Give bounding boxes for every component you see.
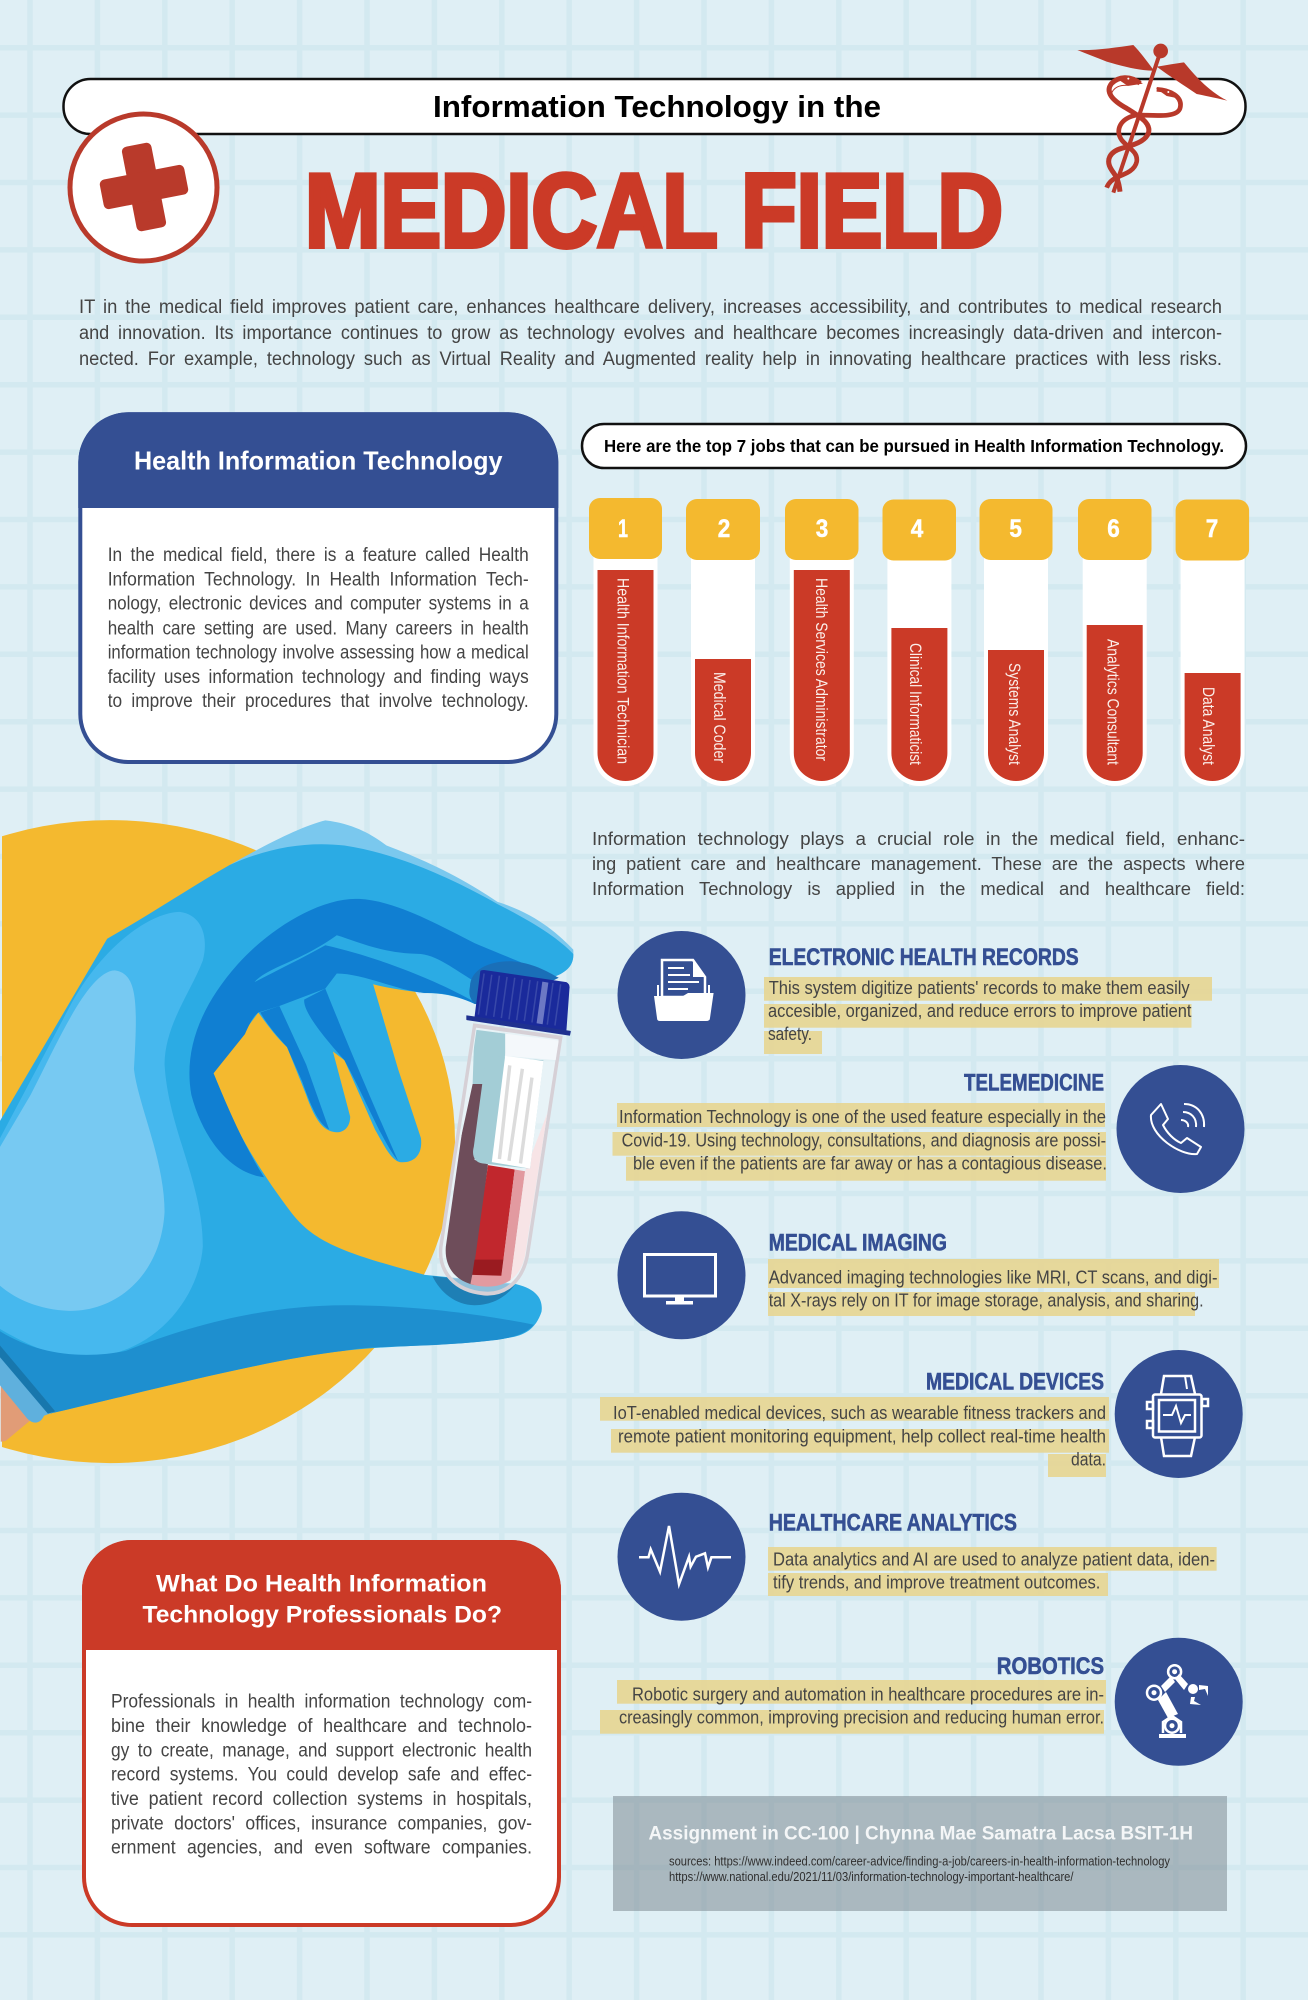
finger crook — [189, 899, 551, 1177]
panel body text: nology, electronic devices and computer systems in a — [108, 594, 529, 615]
panel body text — [111, 1692, 532, 1858]
tube 6: analytics consultant — [1078, 499, 1152, 786]
tube contact shadows — [432, 1276, 515, 1305]
description with highlight: Advanced imaging technologies like MRI, CT scans, and digi- — [769, 1268, 1218, 1288]
icon: robotic arm — [1115, 1638, 1243, 1766]
intro to applications paragraph: Information technology plays a crucial role in the medical field, enhanc- — [592, 828, 1245, 849]
footer: assignment credits and sources: sources: https://www.indeed.com/career-advice/finding-a-job/careers-in-health-information-technology — [669, 1855, 1171, 1869]
glove highlight — [230, 820, 573, 971]
tube 7: data analyst: 7 — [1206, 515, 1218, 543]
illustration: gloved hand holding blood tube — [0, 820, 573, 1463]
tube 5: systems analyst: Systems Analyst — [1005, 663, 1024, 765]
panel body text: health care setting are used. Many careers in health — [108, 618, 529, 639]
tube 4: clinical informaticist: Clinical Informaticist — [906, 643, 925, 765]
footer: assignment credits and sources: Assignment in CC-100 | Chynna Mae Samatra Lacsa BSIT-1H — [648, 1822, 1193, 1844]
icon: caduceus — [1077, 44, 1227, 193]
feature: medical imaging — [618, 1211, 1219, 1339]
tube 7: data analyst — [1176, 500, 1249, 786]
description with highlight — [612, 1103, 1107, 1181]
description with highlight: remote patient monitoring equipment, help collect real-time health — [618, 1426, 1106, 1446]
intro to applications paragraph: ing patient care and healthcare management. These are the aspects where — [592, 853, 1245, 874]
panel body text: Information Technology. In Health Information Tech- — [108, 569, 529, 590]
panel body text: private doctors' offices, insurance companies, gov- — [111, 1813, 532, 1834]
description with highlight: This system digitize patients' records to make them easily — [769, 978, 1190, 998]
title: MEDICAL IMAGING — [769, 1230, 947, 1257]
tube 4: clinical informaticist: 4 — [911, 515, 923, 543]
tube 5: systems analyst — [980, 499, 1052, 786]
description with highlight: Robotic surgery and automation in healthcare procedures are in- — [632, 1684, 1104, 1704]
cuff and wrist — [1, 1385, 31, 1442]
panel body text: facility uses information technology and finding ways — [108, 667, 529, 688]
panel body text: Professionals in health information technology com- — [111, 1692, 532, 1713]
intro paragraph — [79, 297, 1222, 370]
tube 3: health services administrator: Health Services Administrator — [812, 578, 831, 761]
chart: top 7 jobs test tubes — [589, 498, 1249, 786]
feature: robotics — [600, 1638, 1243, 1766]
tube cap — [467, 970, 570, 1035]
intro paragraph: nected. For example, technology such as Virtual Reality and Augmented reality help in innovating healthcare practices with less risks. — [79, 349, 1222, 370]
tube 6: analytics consultant: Analytics Consultant — [1104, 639, 1122, 765]
icon: smartwatch — [1115, 1350, 1243, 1478]
title: ROBOTICS — [997, 1653, 1104, 1680]
tube 3: health services administrator: 3 — [816, 515, 828, 543]
panel body text: bine their knowledge of healthcare and technolo- — [111, 1716, 532, 1737]
description with highlight — [600, 1397, 1109, 1477]
tube 2: medical coder — [686, 499, 760, 786]
panel body text: tive patient record collection systems in hospitals, — [111, 1789, 532, 1810]
description with highlight: data. — [1071, 1449, 1106, 1469]
description with highlight — [764, 977, 1212, 1054]
icon: folder with document — [618, 931, 746, 1059]
feature: healthcare analytics — [618, 1493, 1217, 1621]
panel body text: to improve their procedures that involve technology. — [108, 691, 529, 712]
description with highlight: Data analytics and AI are used to analyze patient data, iden- — [773, 1550, 1215, 1570]
description with highlight: accesible, organized, and reduce errors to improve patient — [768, 1001, 1192, 1021]
title banner — [64, 79, 1246, 134]
panel heading: Health Information Technology — [134, 446, 503, 476]
description with highlight: Covid-19. Using technology, consultations, and diagnosis are possi- — [622, 1130, 1106, 1150]
footer: assignment credits and sources — [613, 1796, 1227, 1911]
tube 6: analytics consultant: 6 — [1107, 515, 1120, 543]
panel heading — [78, 412, 558, 508]
icon: monitor — [618, 1211, 746, 1339]
panel: health information technology — [78, 412, 558, 762]
title: HEALTHCARE ANALYTICS — [769, 1510, 1017, 1537]
description with highlight — [600, 1680, 1106, 1734]
panel heading: What Do Health Information — [156, 1571, 487, 1598]
description with highlight: IoT-enabled medical devices, such as wearable fitness trackers and — [613, 1403, 1106, 1423]
icon: medical cross badge — [70, 114, 217, 261]
description with highlight — [768, 1547, 1217, 1596]
yellow circle — [0, 820, 455, 1463]
tube 3: health services administrator — [785, 499, 858, 786]
tube 2: medical coder: Medical Coder — [710, 672, 729, 763]
tube 7: data analyst: Data Analyst — [1199, 687, 1218, 765]
panel heading — [82, 1540, 561, 1650]
panel body text: In the medical field, there is a feature called Health — [108, 545, 529, 566]
tube 4: clinical informaticist — [882, 500, 956, 786]
intro to applications paragraph — [592, 828, 1245, 899]
palm light — [0, 912, 205, 1357]
panel heading: Technology Professionals Do? — [142, 1602, 502, 1629]
description with highlight: ble even if the patients are far away or has a contagious disease. — [633, 1154, 1107, 1174]
description with highlight: safety. — [768, 1024, 812, 1044]
feature: telemedicine — [612, 1065, 1244, 1193]
tube 2: medical coder: 2 — [718, 515, 730, 543]
heading: medical field: MEDICAL FIELD — [305, 154, 1003, 270]
title banner: Information Technology in the — [433, 89, 881, 124]
description with highlight: creasingly common, improving precision and reducing human error. — [619, 1708, 1104, 1728]
jobs banner: Here are the top 7 jobs that can be pursued in Health Information Technology. — [604, 436, 1224, 456]
glove shadow — [0, 1305, 534, 1414]
intro to applications paragraph: Information Technology is applied in the medical and healthcare field: — [592, 878, 1245, 899]
title: TELEMEDICINE — [964, 1070, 1104, 1097]
tube 1: health information technician — [589, 498, 662, 786]
panel body text — [108, 545, 529, 712]
jobs banner — [582, 424, 1246, 468]
footer: assignment credits and sources: https://www.national.edu/2021/11/03/information-technology-important-healthcare/ — [669, 1870, 1074, 1884]
panel body text: record systems. You could develop safe and effec- — [111, 1765, 532, 1786]
tube 1: health information technician: Health Information Technician — [614, 578, 632, 764]
panel body text: gy to create, manage, and support electronic health — [111, 1740, 532, 1761]
glove body — [0, 844, 573, 1414]
description with highlight: tify trends, and improve treatment outcomes. — [773, 1572, 1100, 1592]
description with highlight: Information Technology is one of the used feature especially in the — [619, 1107, 1106, 1127]
tube 1: health information technician: 1 — [618, 515, 628, 543]
icon: pulse line — [618, 1493, 746, 1621]
panel body text: information technology involve assessing how a medical — [108, 643, 529, 664]
icon: phone — [1116, 1065, 1244, 1193]
blood tube — [432, 970, 570, 1294]
feature: electronic health records — [618, 931, 1212, 1059]
description with highlight — [768, 1259, 1219, 1316]
title: MEDICAL DEVICES — [926, 1368, 1104, 1395]
panel body text: ernment agencies, and even software companies. — [111, 1838, 532, 1858]
intro paragraph: IT in the medical field improves patient care, enhances healthcare delivery, increases accessibility, and contributes to medical research — [79, 297, 1222, 318]
title: ELECTRONIC HEALTH RECORDS — [769, 944, 1079, 971]
description with highlight: tal X-rays rely on IT for image storage, analysis, and sharing. — [769, 1290, 1204, 1310]
feature: medical devices — [600, 1350, 1243, 1478]
panel: what do professionals do — [82, 1540, 561, 1925]
tube 5: systems analyst: 5 — [1009, 515, 1022, 543]
intro paragraph: and innovation. Its importance continues to grow as technology evolves and healthcare becomes increasingly data-driven and intercon- — [79, 323, 1222, 344]
